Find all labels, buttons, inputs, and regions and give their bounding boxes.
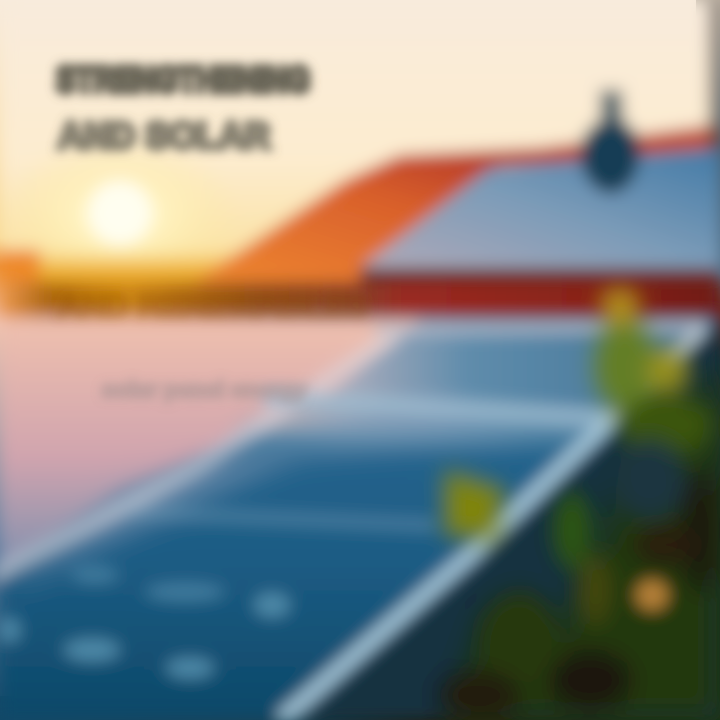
title: AND SOLAR <box>58 115 270 156</box>
sky background <box>0 0 720 290</box>
horizon glow <box>0 250 400 320</box>
blurred text layer <box>56 59 368 402</box>
icon: leaves <box>440 288 720 719</box>
lower solar panel field <box>0 318 720 720</box>
caption: solar panel energy <box>102 377 308 402</box>
blue solar roof <box>360 148 720 272</box>
dark corner with foliage <box>300 288 720 720</box>
right edge dark strip <box>708 0 720 150</box>
subtitle band text: AND RENEWABLES <box>58 290 368 323</box>
sun glow <box>0 135 240 295</box>
eave band <box>0 268 720 318</box>
red roof <box>190 124 720 290</box>
title <box>56 59 310 156</box>
title: STRENGTHENING <box>56 59 310 100</box>
chimney <box>580 90 640 194</box>
panel frame lines <box>0 326 700 716</box>
